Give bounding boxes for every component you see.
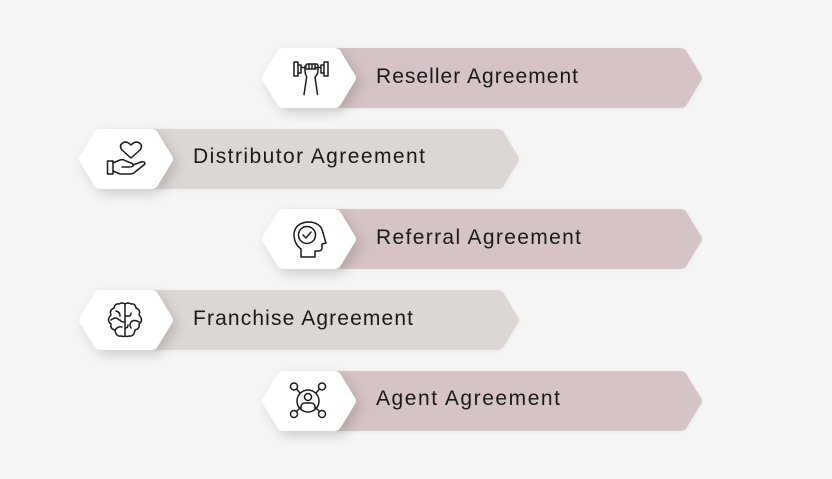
bar: Franchise <box>153 290 519 350</box>
label: Referral Agreement: Referral Agreement <box>376 226 581 249</box>
row: Referral Agreement <box>262 209 702 269</box>
row: Reseller Agreement <box>262 48 702 108</box>
label: Distributor Agreement: Distributor Agreement <box>193 145 425 168</box>
label: Franchise Agreement: Franchise Agreement <box>193 307 413 330</box>
label: Reseller Agreement: Reseller Agreement <box>376 65 578 88</box>
icon: brain <box>108 303 142 336</box>
row: Distributor Agreement <box>79 129 519 189</box>
bar: Reseller <box>335 48 702 108</box>
hexagon: Franchise <box>79 290 173 350</box>
icon: hand holding heart <box>108 142 145 174</box>
row: Agent Agreement <box>262 371 702 431</box>
bar: Distributor <box>153 129 519 189</box>
hexagon: Reseller <box>262 48 356 108</box>
bar: Agent <box>335 371 702 431</box>
row: Franchise Agreement <box>79 290 519 350</box>
hexagon: Referral <box>262 209 356 269</box>
icon: head with check <box>294 222 326 257</box>
hexagon: Distributor <box>79 129 173 189</box>
icon: network person <box>290 383 326 418</box>
hexagon: Agent <box>262 371 356 431</box>
label: Agent Agreement: Agent Agreement <box>376 387 560 410</box>
icon: dumbbell in fist <box>294 62 328 94</box>
bar: Referral <box>335 209 702 269</box>
